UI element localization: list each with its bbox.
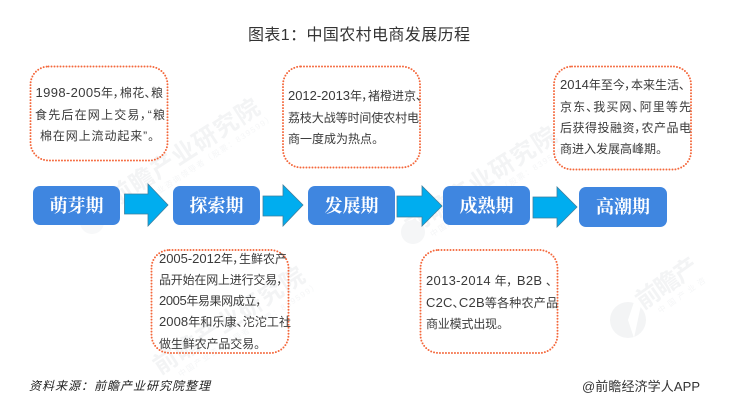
callout: 2005-2012: 2008年和乐康、沱沱工社: [159, 314, 291, 329]
callout: 1998-2005: [30, 66, 168, 160]
arrow 1: [124, 184, 168, 226]
stage: 探索期: [173, 186, 260, 225]
stage: 高潮期: 高潮期: [596, 196, 650, 217]
callout: 1998-2005: 1998-2005年，棉花、粮: [36, 85, 163, 100]
watermarks: 前瞻产业研究院: [148, 261, 310, 380]
callout: 2013-2014: C2C、C2B等各种农产品: [426, 295, 558, 310]
callout: 2014 to present: 后获得投融资，农产品电: [560, 120, 691, 135]
callout: 2005-2012: 品开始在网上进行交易，: [159, 272, 283, 287]
credit: @前瞻经济学人APP: [582, 379, 700, 394]
stage: 成熟期: [443, 186, 530, 225]
callout: 2013-2014: [420, 250, 558, 353]
watermarks: 中国产业咨询领导者（股票：839599）: [131, 113, 275, 211]
watermarks: 中国产业咨询领导者（股票：839599）: [176, 281, 320, 379]
watermarks: 中国产业咨询领导者（股票：839599）: [428, 141, 572, 239]
arrow 4: [533, 187, 577, 227]
callout: 2012-2013: 商一度成为热点。: [288, 131, 378, 146]
watermarks: 前瞻产业研究院: [400, 121, 562, 240]
callout: 1998-2005: 食先后在网上交易，“粮: [35, 107, 165, 122]
source note: 资料来源：前瞻产业研究院整理: [29, 379, 212, 393]
callout: 2013-2014: 2013-2014 年， B2B 、: [426, 273, 552, 288]
callout: 2012-2013: [283, 66, 422, 168]
stage: 发展期: [308, 186, 395, 225]
callout: 2012-2013: 荔枝大战等时间使农村电: [288, 110, 419, 125]
callout: 2014 to present: 京东、我买网、阿里等先: [560, 100, 691, 114]
stage: 发展期: 发展期: [324, 196, 378, 216]
stage: 探索期: 探索期: [190, 195, 244, 216]
stage: 萌芽期: [33, 186, 120, 225]
stage: 高潮期: [579, 187, 667, 227]
callout: 2013-2014: 商业模式出现。: [426, 316, 503, 331]
callout: 2014 to present: 商进入发展高峰期。: [560, 141, 662, 156]
callout: 2005-2012: 2005年易果网成立，: [159, 293, 262, 308]
stage: 萌芽期: 萌芽期: [50, 196, 104, 216]
callout: 2005-2012: [152, 250, 291, 353]
callout: 2005-2012: 2005-2012年，生鲜农产: [159, 251, 287, 266]
arrow 2: [263, 185, 303, 226]
arrow 3: [397, 186, 442, 226]
callout: 2014 to present: 2014年至今，本来生活、: [560, 77, 685, 92]
watermarks: 中国产业咨: [656, 275, 707, 315]
watermarks: 前瞻产业研究院: [103, 93, 265, 212]
callout: 2012-2013: 2012-2013年，褚橙进京、: [288, 88, 422, 103]
callout: 2014 to present: [554, 66, 691, 170]
stage: 成熟期: 成熟期: [460, 196, 514, 216]
watermarks: 前瞻产: [631, 253, 704, 315]
watermarks: [80, 90, 709, 388]
callout: 1998-2005: 棉在网上流动起来”。: [40, 129, 154, 143]
callout: 2005-2012: 做生鲜农产品交易。: [159, 336, 260, 351]
title: 图表1：中国农村电商发展历程: [248, 26, 470, 44]
